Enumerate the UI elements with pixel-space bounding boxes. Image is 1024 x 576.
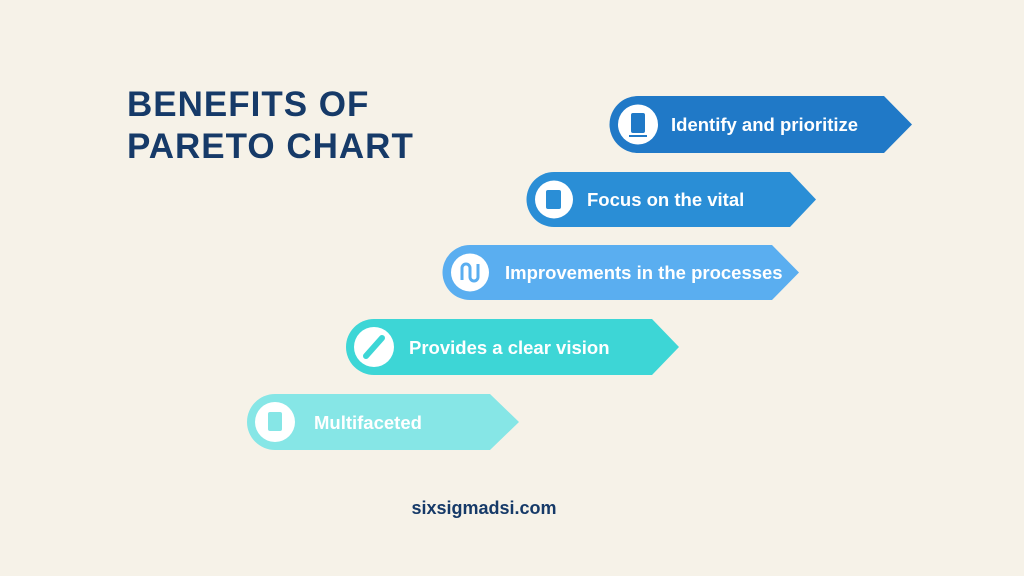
bar: Focus on the vital	[526, 172, 816, 227]
title	[127, 85, 414, 166]
bar: Multifaceted: Multifaceted	[314, 412, 422, 433]
icon: book	[535, 180, 573, 218]
title: PARETO CHART	[127, 127, 414, 166]
bar: Focus on the vital: Focus on the vital	[587, 189, 744, 210]
title: BENEFITS OF	[127, 85, 369, 124]
icon: pencil	[354, 327, 394, 367]
icon: document	[255, 402, 295, 442]
icon: process arrows	[451, 254, 489, 292]
bar: Improvements in the processes	[442, 245, 799, 300]
bar: Improvements in the processes: Improvements in the processes	[505, 262, 783, 283]
bar: Provides a clear vision	[346, 319, 679, 375]
bar: Identify and prioritize: Identify and prioritize	[671, 114, 858, 135]
bar: Multifaceted	[247, 394, 519, 450]
footer url: sixsigmadsi.com	[411, 498, 557, 518]
bar: Provides a clear vision: Provides a clear vision	[409, 337, 610, 358]
bar: Identify and prioritize	[610, 96, 912, 153]
icon: phone	[618, 104, 658, 144]
